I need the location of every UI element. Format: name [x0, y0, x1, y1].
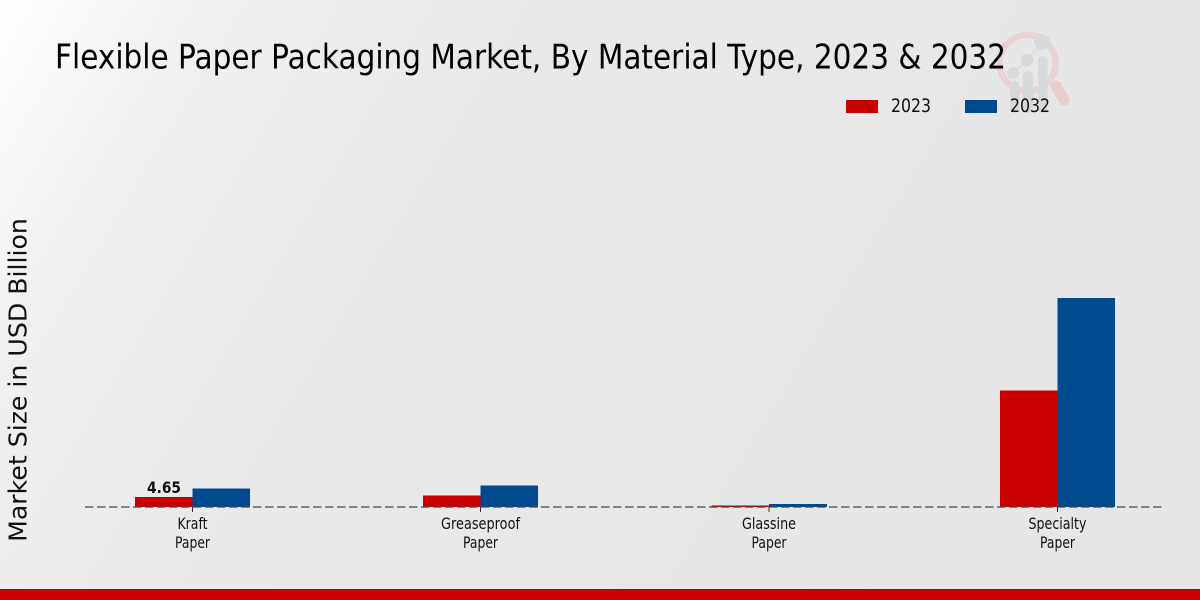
data label: 4.65	[147, 478, 181, 497]
legend	[846, 95, 1050, 117]
bar chart	[85, 298, 1165, 552]
legend: 2023	[846, 95, 931, 117]
category label: Kraft Paper	[175, 514, 210, 552]
title: Flexible Paper Packaging Market, By Material Type, 2023 & 2032	[55, 38, 1006, 78]
category label: Kraft Paper: Paper	[175, 533, 210, 552]
category label: Kraft Paper: Kraft	[178, 514, 208, 533]
category label: Glassine Paper: Glassine	[742, 514, 796, 533]
category label: Glassine Paper	[742, 514, 796, 552]
legend: 2032	[965, 95, 1050, 117]
bars: Greaseproof Paper	[423, 486, 538, 507]
bars: Glassine Paper	[712, 504, 827, 507]
category label: Greaseproof Paper	[441, 514, 520, 552]
category label: Greaseproof Paper: Paper	[463, 533, 498, 552]
category label: Greaseproof Paper: Greaseproof	[441, 514, 520, 533]
baseline	[85, 506, 1165, 508]
category label: Specialty Paper	[1028, 514, 1086, 552]
bars: Kraft Paper	[135, 488, 250, 507]
footer bar	[0, 589, 1200, 600]
category label: Glassine Paper: Paper	[752, 533, 787, 552]
legend: 2032: 2032	[1010, 95, 1050, 117]
category label: Specialty Paper: Specialty	[1028, 514, 1086, 533]
category label: Specialty Paper: Paper	[1040, 533, 1075, 552]
bars: Specialty Paper	[1000, 298, 1115, 507]
legend: 2023: 2023	[891, 95, 931, 117]
watermark logo icon	[1000, 34, 1064, 113]
y-axis label: Market Size in USD Billion	[4, 218, 32, 542]
